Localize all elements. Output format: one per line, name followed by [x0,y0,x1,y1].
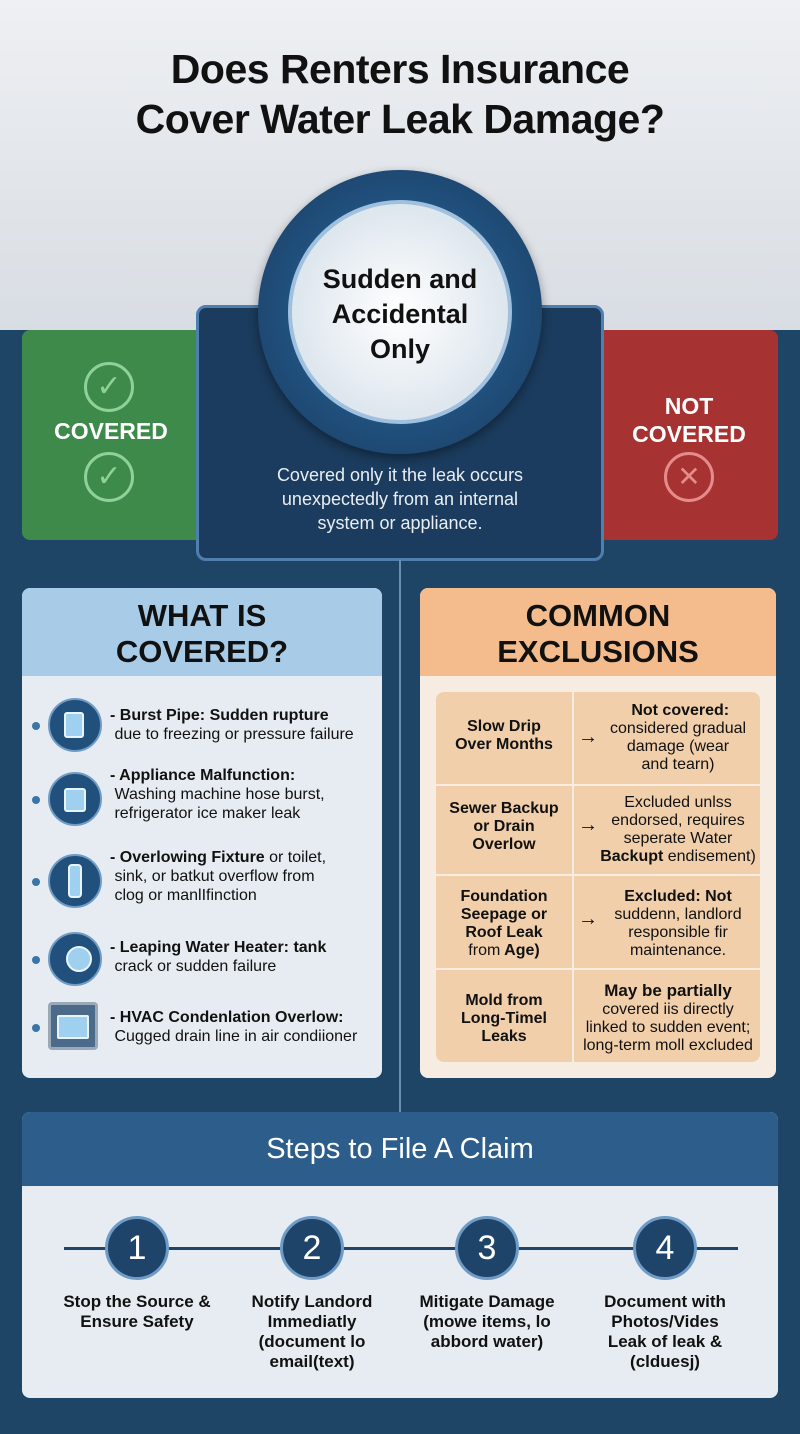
item 3: - Overlowing Fixture or toilet, [110,849,326,866]
row 1: Slow Drip [467,718,541,735]
heading [22,1112,778,1186]
table: Not covered: [631,702,729,719]
step 2: email(text) [269,1352,355,1371]
icon: check top [84,362,134,412]
panel: common exclusions [420,588,776,1078]
item 2: refrigerator ice maker leak [114,805,300,822]
step 4: 4 [656,1229,674,1267]
label not covered [632,393,746,447]
panel: not covered [600,330,778,540]
item 3: sink, or batkut overflow from [114,868,315,885]
table: covered iis directly [602,1001,734,1018]
table: considered gradual [610,720,746,737]
step 1: 1 [128,1229,146,1267]
icon: check bottom: ✓ [96,460,122,493]
icon: check top: ✓ [96,370,122,403]
table: long-term moll excluded [583,1037,753,1054]
item 2: - Appliance Malfunction: [110,767,295,784]
circle badge: Sudden and [323,264,477,294]
panel: covered [22,330,200,540]
step 4: Leak of leak & [608,1332,722,1351]
step 1 [63,1216,211,1331]
row 3: Roof Leak [465,924,543,941]
title: Does Renters Insurance [171,46,629,92]
row 3: Foundation [460,888,548,905]
table: and tearn) [642,756,714,773]
item 1: due to freezing or pressure failure [114,726,354,743]
heading: COVERED? [116,634,288,669]
heading: EXCLUSIONS [497,634,699,669]
step 2: 2 [303,1229,321,1267]
row 3 [460,888,548,959]
label not covered: COVERED [632,421,746,447]
title: Cover Water Leak Damage? [136,96,664,142]
table: Excluded: Not [624,888,732,905]
item 4 [32,932,326,986]
timeline [64,1247,738,1250]
center text: Covered only it the leak occurs [277,465,523,485]
item 2 [32,767,325,826]
row 4: Leaks [481,1028,527,1045]
step 3 [419,1216,555,1351]
item 3: clog or manlIfinction [114,887,257,904]
icon: check bottom [84,452,134,502]
item 5: - HVAC Condenlation Overlow: [110,1009,343,1026]
row 4 [461,992,547,1045]
panel: center [196,305,604,561]
item 1 [32,698,354,752]
step 2: (document lo [259,1332,365,1351]
item 4: crack or sudden failure [114,958,276,975]
circle badge: Only [370,334,430,364]
heading [420,588,776,676]
row 2: or Drain [473,818,535,835]
table: → [578,726,598,748]
step 4: Photos/Vides [611,1312,719,1331]
item 4: - Leaping Water Heater: tank [110,939,326,956]
step 4: (clduesj) [630,1352,700,1371]
table [436,692,760,1062]
table: suddenn, landlord [614,906,742,923]
row 2: Sewer Backup [449,800,559,817]
item 5 [32,1002,358,1050]
step 3: (mowe items, lo [423,1312,551,1331]
step 4 [604,1216,726,1371]
step 1: Stop the Source & [63,1292,211,1311]
label not covered: NOT [665,393,713,419]
table: maintenance. [630,942,726,959]
center text [277,465,523,533]
divider line [399,560,401,1112]
step 2: Notify Landord [252,1292,372,1311]
panel: steps [22,1112,778,1398]
heading [22,588,382,676]
item 1: - Burst Pipe: Sudden rupture [110,707,329,724]
table: → [578,814,598,836]
item 5: Cugged drain line in air condiioner [114,1028,357,1045]
table: seperate Water [624,830,732,847]
step 3: 3 [478,1229,496,1267]
row 1: Over Months [455,736,553,753]
heading: Steps to File A Claim [266,1133,534,1165]
heading: WHAT IS [138,598,266,633]
center text: system or appliance. [317,513,483,533]
row 2 [449,800,559,853]
table: damage (wear [627,738,729,755]
row 4: Long-Timel [461,1010,547,1027]
step 3: abbord water) [431,1332,543,1351]
table: linked to sudden event; [586,1019,750,1036]
table: endorsed, requires [611,812,745,829]
row 2: Overlow [472,836,536,853]
circle badge: Accidental [332,299,468,329]
table: May be partially [604,981,732,1000]
list [32,698,358,1050]
step 1: Ensure Safety [80,1312,194,1331]
circle badge [258,170,542,454]
step 3: Mitigate Damage [419,1292,555,1311]
step 2 [252,1216,372,1371]
table: Excluded unlss [624,794,732,811]
top background [0,0,800,330]
center text: unexpectedly from an internal [282,489,518,509]
row 1 [455,718,553,753]
heading: COMMON [526,598,670,633]
title [136,46,664,142]
item 2: Washing machine hose burst, [114,786,325,803]
panel: what is covered [22,588,382,1078]
step 2: Immediatly [268,1312,356,1331]
table: responsible fir [628,924,728,941]
step 4: Document with [604,1292,726,1311]
item 3 [32,849,326,908]
table: Backupt endisement) [600,848,756,865]
row 3: Seepage or [461,906,547,923]
row 4: Mold from [465,992,543,1009]
icon: x [664,452,714,502]
icon: x: ✕ [677,461,701,492]
table: → [578,908,598,930]
label covered: COVERED [54,418,168,444]
row 3: from Age) [468,942,540,959]
